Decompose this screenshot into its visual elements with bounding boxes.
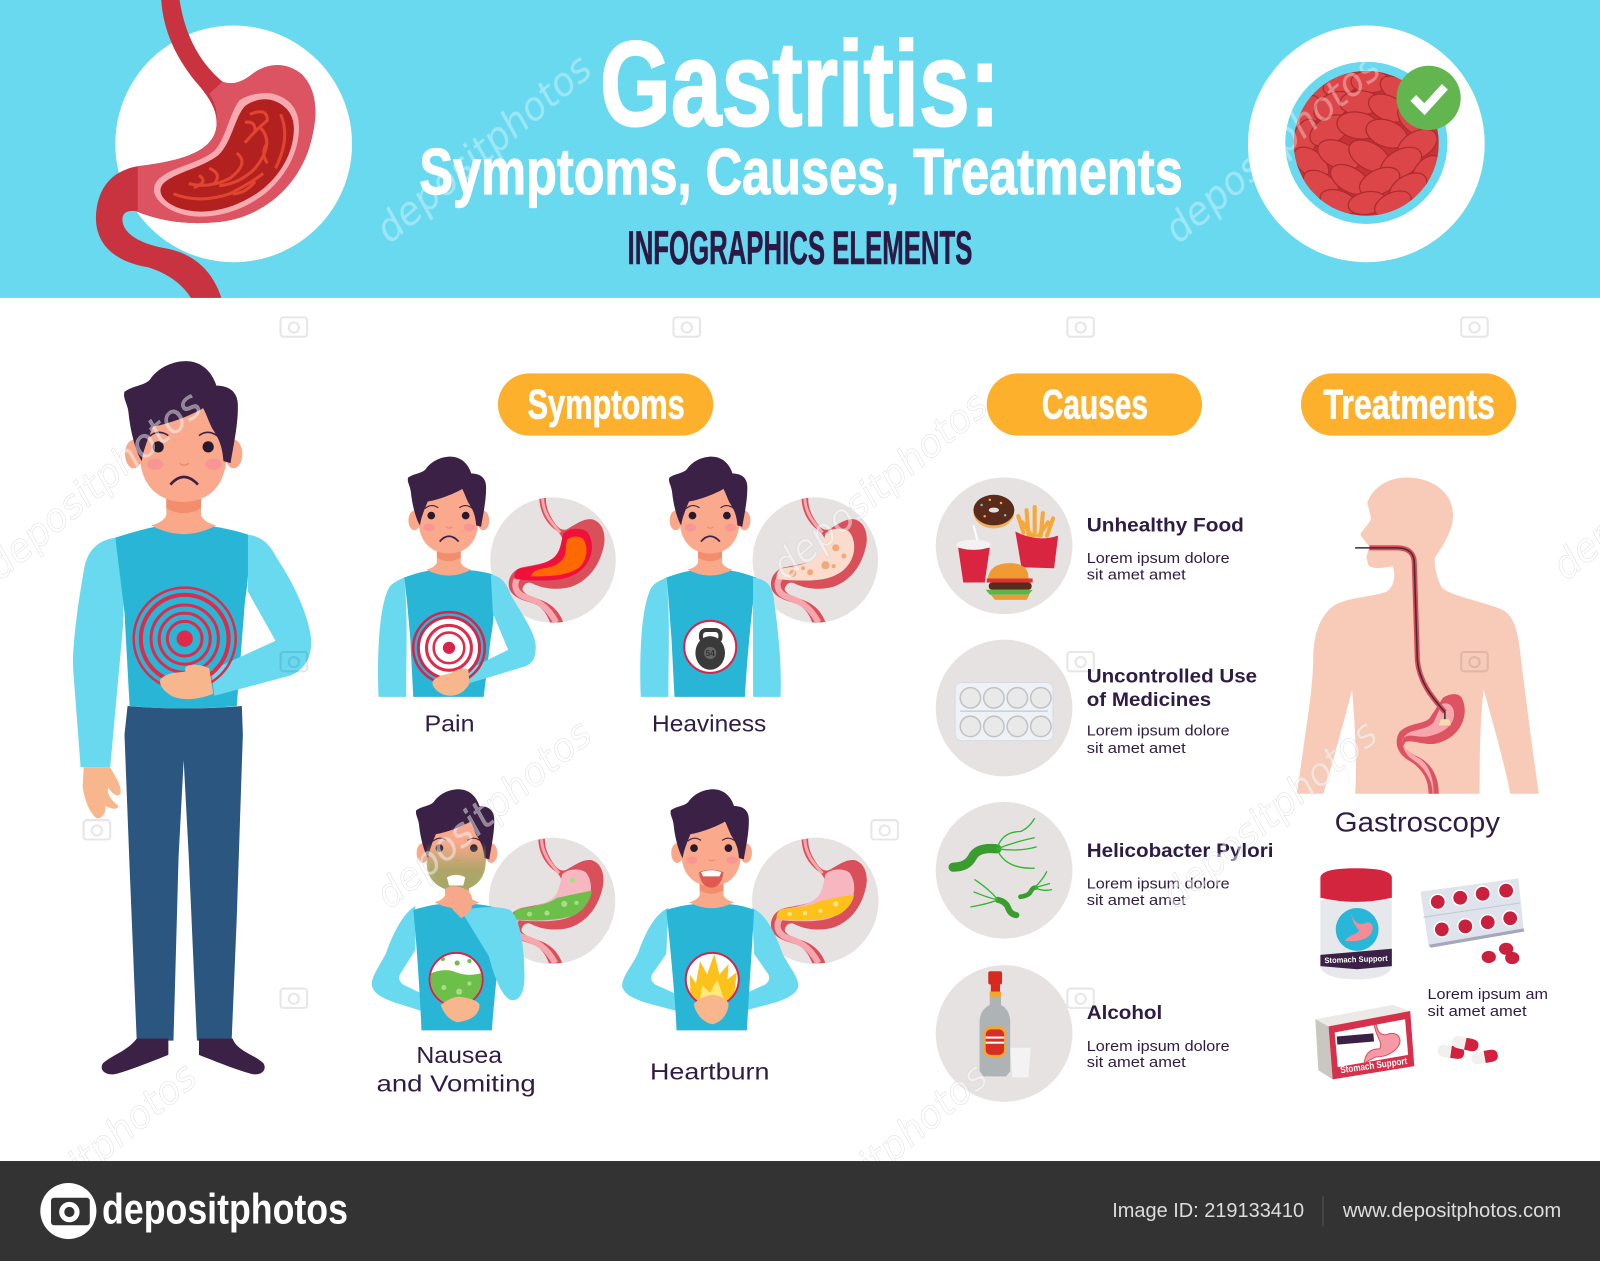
label: Pain: [424, 711, 474, 737]
watermarks: depositphotos: [1156, 46, 1390, 253]
label: Heaviness: [652, 711, 766, 737]
treatment: text: Lorem ipsum am: [1428, 987, 1548, 1003]
icon: green check badge: [1396, 66, 1461, 130]
treatment: red pill blister: [1420, 878, 1524, 964]
text: unhealthy food: Lorem ipsum dolore: [1087, 551, 1230, 567]
icon: white pill blister: [955, 683, 1053, 741]
treatment: medicine box: [1315, 1005, 1414, 1079]
icon: bottle and glass: [980, 971, 1031, 1077]
watermarks: depositphotos: [367, 711, 601, 918]
treatment: text: sit amet amet: [1428, 1004, 1527, 1020]
watermarks: depositphotos: [763, 383, 997, 589]
sick green face tint: [427, 843, 486, 891]
text: medicines: Lorem ipsum dolore: [1087, 724, 1230, 740]
text: alcohol: sit amet amet: [1087, 1055, 1186, 1071]
heading pill: Causes: [987, 373, 1202, 436]
symptom: pain: [378, 457, 616, 737]
text: helicobacter: Lorem ipsum dolore: [1087, 877, 1230, 893]
icon: kettlebell: 54: [706, 649, 715, 658]
text: medicines: sit amet amet: [1087, 741, 1186, 757]
pain rings: [134, 588, 236, 690]
symptom: nausea and vomiting: [372, 789, 615, 1097]
text: alcohol: [1087, 1002, 1230, 1071]
text: helicobacter: sit amet amet: [1087, 893, 1186, 909]
text: medicines: [1087, 666, 1257, 757]
watermarks: depositphotos: [1153, 711, 1387, 918]
label: Heartburn: [650, 1058, 769, 1084]
heading pill: Symptoms: [498, 373, 713, 436]
footer bar: [0, 1161, 1600, 1261]
logo wordmark: depositphotos: [102, 1185, 348, 1233]
icon: soda cup: [956, 525, 991, 583]
cause: uncontrolled use of medicines: [936, 640, 1257, 776]
icon: bacteria: [953, 818, 1052, 915]
heading pill: Causes: Causes: [1042, 380, 1148, 427]
icon: burger: [986, 563, 1033, 600]
subtitle: Symptoms, Causes, Treatments: [419, 135, 1183, 208]
text: unhealthy food: Unhealthy Food: [1087, 515, 1244, 537]
website: www.depositphotos.com: [1342, 1200, 1561, 1222]
icon: fries: [1015, 507, 1058, 568]
open mouth: [699, 870, 723, 888]
treatment: medicine box: Stomach Support: [1340, 1056, 1409, 1076]
cause: alcohol: [936, 965, 1230, 1102]
treatment: text: [1428, 987, 1548, 1020]
heading pill: Symptoms: Symptoms: [528, 380, 685, 427]
main figure: man holding stomach: [73, 361, 311, 1074]
icon: kettlebell: [684, 621, 736, 673]
label: Gastroscopy: [1335, 806, 1500, 837]
cause: helicobacter pylori: [936, 802, 1273, 939]
icon: donut: [973, 495, 1014, 528]
text: helicobacter: [1087, 840, 1273, 909]
text: alcohol: Alcohol: [1087, 1002, 1162, 1024]
text: medicines: of Medicines: [1087, 689, 1211, 711]
tagline: INFOGRAPHICS ELEMENTS: [628, 222, 972, 274]
text: medicines: Uncontrolled Use: [1087, 666, 1257, 688]
text: alcohol: Lorem ipsum dolore: [1087, 1039, 1230, 1055]
icon: inflamed stomach lining with check mark: [1248, 26, 1485, 262]
treatment: medicine jar: [1320, 868, 1392, 979]
heading pill: Treatments: Treatments: [1323, 380, 1495, 427]
cause: unhealthy food: [936, 477, 1244, 614]
text: unhealthy food: [1087, 515, 1244, 583]
title: Gastritis:: [600, 16, 1000, 151]
symptom: heaviness: [640, 457, 878, 737]
heading pill: Treatments: [1301, 373, 1516, 436]
header banner: [0, 0, 1600, 298]
watermarks: depositphotos: [763, 1054, 997, 1260]
symptom: heartburn: [622, 789, 879, 1084]
label: Nausea: [416, 1042, 503, 1068]
watermarks: depositphotos: [367, 46, 601, 253]
icon: stomach anatomy in white circle: [96, 0, 352, 298]
label: and Vomiting: [377, 1071, 536, 1097]
treatment: gastroscopy body diagram: [1297, 477, 1539, 837]
icon: depositphotos logo: [40, 1183, 96, 1239]
text: unhealthy food: sit amet amet: [1087, 567, 1186, 583]
label: [377, 1042, 536, 1097]
treatment: medicine jar: Stomach Support: [1324, 954, 1388, 965]
text: helicobacter: Helicobacter Pylori: [1087, 840, 1273, 862]
treatment: capsules: [1437, 1035, 1499, 1065]
image id: Image ID: 219133410: [1112, 1200, 1304, 1222]
